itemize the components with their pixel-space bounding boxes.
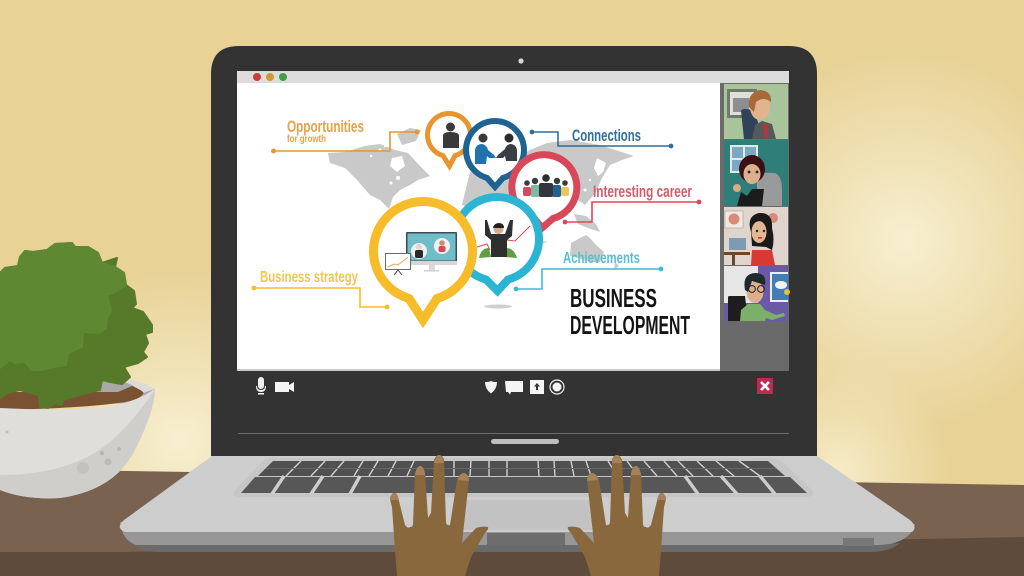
toolbar: leave button (757, 378, 773, 394)
pin: blue handshake (466, 121, 524, 187)
shared slide (237, 83, 720, 370)
bowl (0, 389, 155, 498)
slide: achievements callout: Achievements (563, 250, 640, 267)
presentation board (386, 254, 410, 275)
pin: yellow strategy (374, 202, 472, 320)
slide: opportunities callout: for growth (287, 134, 326, 145)
keyboard keys (241, 461, 807, 494)
toolbar: shield (485, 380, 497, 394)
slide title: DEVELOPMENT (570, 310, 690, 340)
toolbar: record (550, 380, 564, 394)
webcam (518, 58, 524, 64)
plant foliage (0, 243, 152, 408)
laptop base (120, 456, 915, 552)
slide: business strategy callout: Business strategy (260, 269, 358, 286)
pin: red team (512, 155, 577, 228)
slide: business strategy callout (252, 269, 389, 309)
participant thumbnail: man in suit (724, 84, 788, 139)
toolbar: video camera (275, 382, 294, 392)
bowl interior (95, 380, 155, 404)
bowl rear rim (120, 378, 155, 393)
slide: achievements callout (514, 250, 663, 291)
slide title: BUSINESS (570, 283, 657, 313)
pin: teal achiever (455, 197, 539, 308)
base front edge (120, 522, 915, 552)
potted plant (0, 243, 155, 498)
slide: interesting career callout (563, 182, 701, 224)
trackpad (462, 500, 592, 530)
participants sidebar (720, 83, 789, 371)
slide: world map (328, 128, 634, 270)
toolbar: share upload (530, 380, 544, 394)
participant thumbnail: woman waving (724, 140, 788, 206)
slide: connections callout (530, 126, 673, 148)
keyboard well (233, 458, 813, 497)
slide: connections callout: Connections (572, 126, 641, 145)
soil (0, 386, 144, 410)
slide lower edge (237, 369, 720, 371)
pin: orange person (428, 113, 470, 166)
toolbar: microphone (256, 377, 266, 394)
base deck (120, 456, 915, 532)
slide title (570, 283, 690, 340)
laptop lid (211, 46, 817, 456)
monitor with video call (406, 232, 457, 272)
slide: opportunities callout: Opportunities (287, 117, 364, 136)
toolbar: chat bubble (505, 381, 523, 394)
browser title bar (237, 71, 789, 83)
right hand (568, 455, 666, 576)
participant thumbnail: woman at desk (724, 207, 788, 265)
slide: interesting career callout: Interesting career (593, 182, 692, 201)
lid lower divider (238, 433, 789, 434)
lid notch handle (491, 439, 559, 444)
left hand (390, 455, 488, 576)
table (0, 469, 1024, 576)
participant thumbnail: man with glasses (724, 266, 790, 321)
slide: opportunities callout (271, 117, 419, 153)
